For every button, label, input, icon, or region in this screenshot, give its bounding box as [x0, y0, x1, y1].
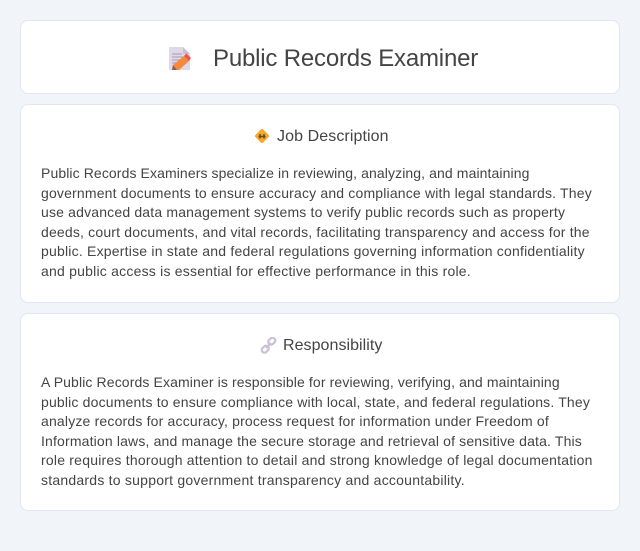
text block: job description: use advanced data management systems to verify public records such as property	[41, 204, 565, 220]
text block: responsibility: A Public Records Examiner is responsible for reviewing, verifying, and maintaining	[41, 374, 560, 390]
text block: responsibility: role requires thorough attention to detail and strong knowledge of legal documentation	[41, 452, 593, 468]
text block: job description: Public Records Examiners specialize in reviewing, analyzing, and maintaining	[41, 165, 530, 181]
text block: responsibility: public documents to ensure compliance with local, state, and federal regulations. They	[41, 394, 590, 410]
panel: job description	[20, 104, 620, 303]
panel: title card	[20, 20, 620, 94]
panel: responsibility	[20, 313, 620, 511]
text block: job description: public. Expertise in state and federal regulations governing information confidentiality	[41, 243, 585, 259]
text block: job description: government documents to ensure accuracy and compliance with legal standards. They	[41, 185, 592, 201]
title: Public Records Examiner	[213, 45, 478, 72]
heading: responsibility: Responsibility	[283, 337, 382, 354]
icon: chain link	[260, 337, 276, 354]
icon: orange diamond sign	[254, 128, 270, 144]
text block: responsibility	[41, 374, 593, 488]
text block: responsibility: analyze records for accuracy, process request for information under Freedom of	[41, 413, 549, 429]
text block: job description: deeds, court documents, and vital records, facilitating transparency and access for the	[41, 224, 590, 240]
text block: responsibility: Information laws, and manage the secure storage and retrieval of sensitive data. This	[41, 433, 582, 449]
heading: job description: Job Description	[277, 128, 389, 145]
icon: document with pencil	[169, 47, 191, 70]
text block: job description: and public access is essential for effective performance in this role.	[41, 263, 471, 279]
text block: responsibility: standards to support government transparency and accountability.	[41, 472, 465, 488]
text block: job description	[41, 165, 592, 279]
